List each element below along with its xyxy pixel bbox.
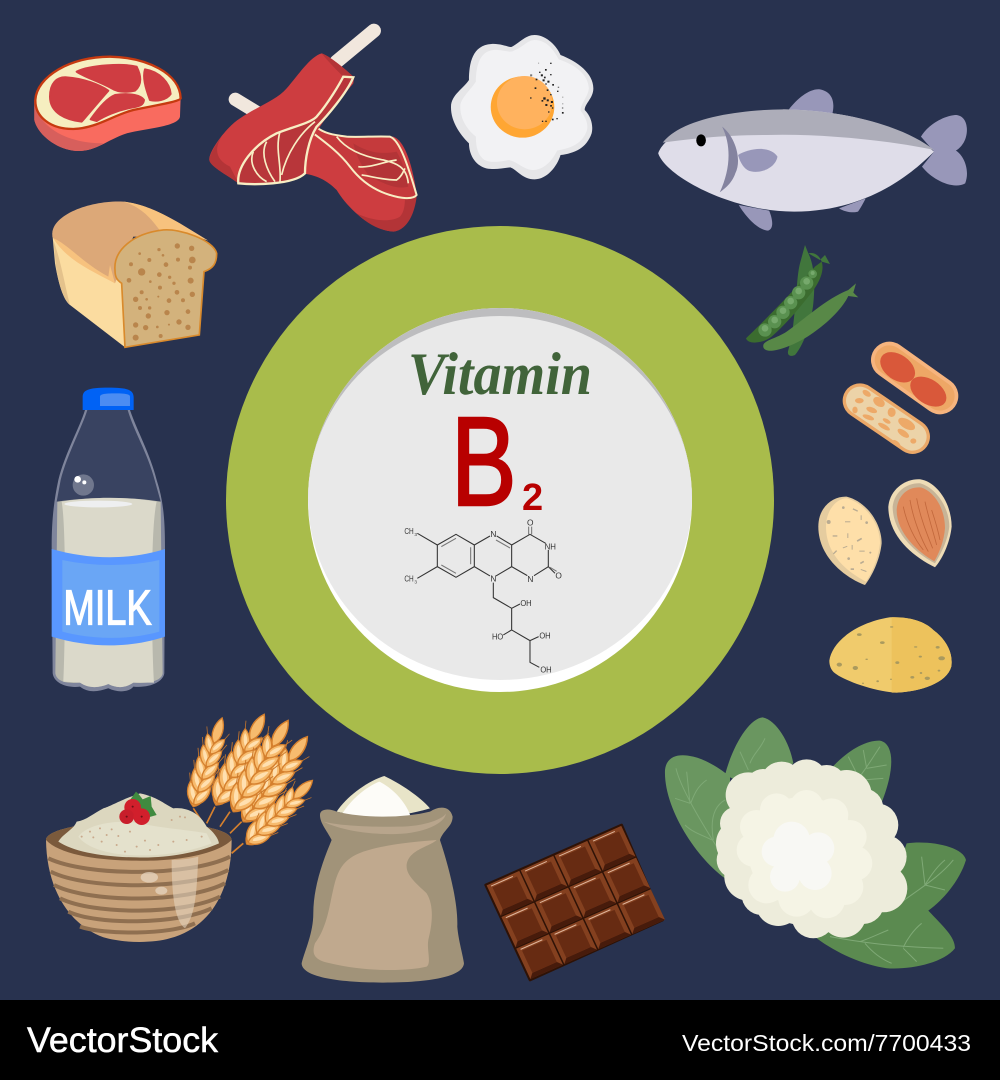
heading: Vitamin: Vitamin [408,341,592,407]
chemical formula: riboflavin: O [527,518,534,528]
chemical formula: riboflavin: 3 [414,532,417,537]
icon: porridge bowl with wheat [46,707,322,942]
chemical formula: riboflavin: N [490,529,496,539]
plate well [308,308,692,692]
footer logo text: VectorStock [27,1021,219,1060]
icon: peas [746,245,858,356]
chemical formula: riboflavin: NH [545,542,556,552]
chemical formula: riboflavin: HO [492,632,504,642]
label text: MILK: MILK [63,580,152,635]
footer image id: VectorStock.com/7700433 [682,1030,971,1056]
chemical formula: riboflavin: OH [540,664,552,674]
icon: loaf of bread [52,202,217,347]
chemical formula: riboflavin: CH [404,573,414,583]
icon: potato [829,617,952,693]
bowl [46,821,232,942]
icon: milk bottle [52,388,165,691]
icon: beef steak [34,57,181,151]
icon: peanuts [852,346,952,448]
icon: flour sack [302,776,464,983]
wheat ears [180,707,322,854]
chemical formula: riboflavin: OH [520,598,532,608]
icon: almonds [818,479,952,585]
chemical formula: riboflavin: OH [539,631,551,641]
chemical formula: riboflavin: CH [404,526,414,536]
heading: B2: B [451,391,517,532]
footer bar [0,1000,1000,1080]
icon: fish [658,89,967,231]
icon: cauliflower [665,717,966,969]
chemical formula: riboflavin: O [555,571,562,581]
plate face [308,316,692,680]
chemical formula: riboflavin: N [527,574,533,584]
icon: lamb chops [209,31,417,232]
icon: fried egg [451,35,593,179]
heading: B2: 2 [522,477,543,519]
icon: chocolate bar [486,825,665,980]
plate rim [226,226,774,774]
plate [226,226,774,774]
berries and leaves [130,792,157,817]
porridge [58,793,219,857]
chemical formula: riboflavin: 3 [414,579,417,584]
chemical formula: riboflavin: N [490,574,496,584]
chemical formula: riboflavin [404,518,562,674]
